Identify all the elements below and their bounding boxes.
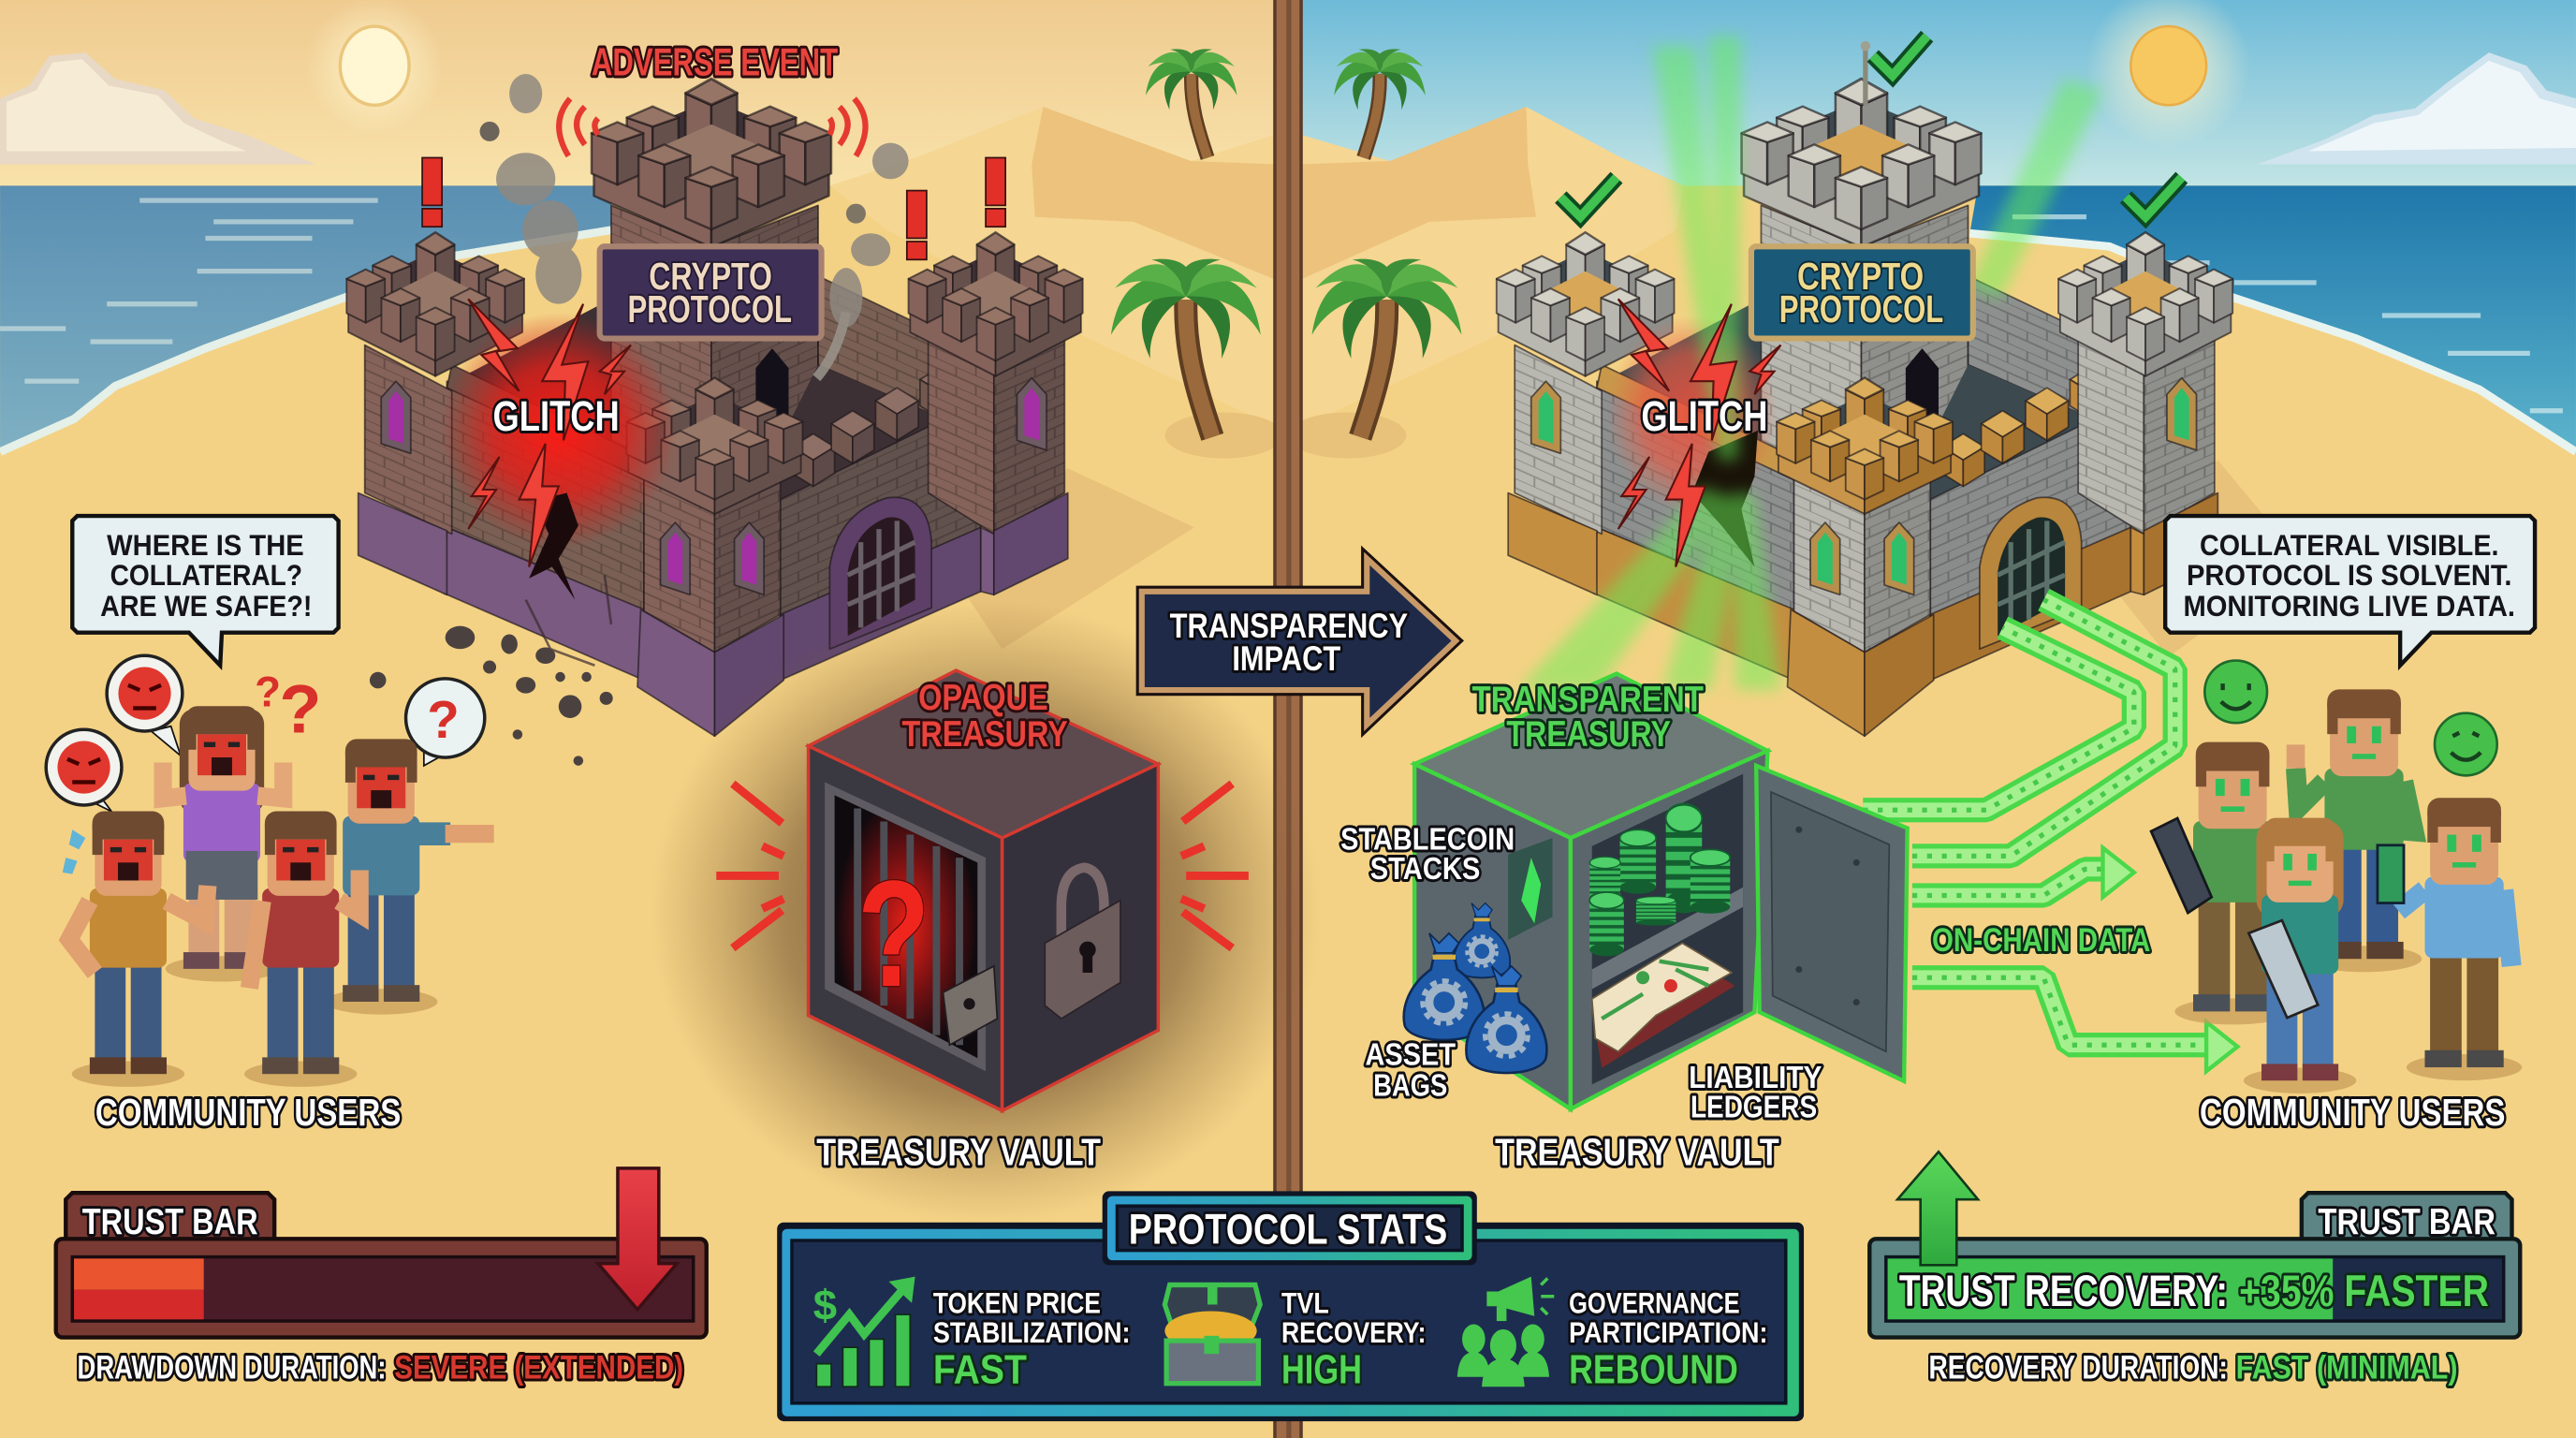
exclamation: right (986, 157, 1005, 227)
tab (66, 1193, 274, 1242)
track (1886, 1257, 2504, 1321)
vault interior (1592, 774, 1743, 1084)
red question mark: ? (857, 850, 929, 1019)
text: token price stabilization: FAST (933, 1347, 1027, 1393)
vault body (1414, 674, 1767, 1109)
speech bubble: worried users: WHERE IS THE (107, 528, 304, 562)
angry bubble: left (46, 729, 122, 812)
caption: recovery duration: RECOVERY DURATION: (1928, 1349, 2228, 1386)
text: token price stabilization: STABILIZATION: (933, 1315, 1131, 1349)
label plate: crypto protocol right: CRYPTO (1797, 255, 1924, 298)
castle: damaged left protocol (346, 79, 1083, 736)
panel: left trust bar (56, 1168, 707, 1338)
icon: megaphone and community (1457, 1277, 1554, 1387)
speech bubble: confident users: COLLATERAL VISIBLE. (2200, 528, 2498, 562)
text: asset bags (1365, 1037, 1456, 1104)
icon: rising price chart (813, 1277, 915, 1387)
text: liability ledgers: LEDGERS (1690, 1090, 1817, 1124)
red alert ticks (716, 784, 1249, 948)
green crystal (1508, 838, 1553, 940)
text: governance participation (1569, 1285, 1767, 1393)
label plate: crypto protocol right: PROTOCOL (1779, 287, 1943, 330)
text: governance participation: PARTICIPATION: (1569, 1315, 1767, 1349)
label plate: crypto protocol right (1751, 246, 1973, 339)
speech bubble: worried users (72, 516, 339, 666)
asset bags (1404, 903, 1546, 1073)
red question marks (255, 668, 321, 748)
text: stablecoin stacks: STABLECOIN (1340, 822, 1515, 857)
text: trust bar left: TRUST BAR (82, 1202, 258, 1242)
lightning bolts: left (468, 299, 631, 566)
person: man in red (244, 812, 359, 1087)
text: transparent treasury: TREASURY (1506, 714, 1671, 755)
recovery fill (1888, 1258, 2333, 1319)
label plate: crypto protocol left: CRYPTO (649, 255, 772, 298)
angry bubble: top (107, 655, 183, 756)
text: governance participation: REBOUND (1569, 1347, 1738, 1393)
text: GLITCH right: GLITCH (1641, 392, 1767, 440)
text: opaque treasury: OPAQUE (918, 678, 1048, 718)
track (72, 1257, 694, 1321)
text: tvl recovery: TVL (1281, 1285, 1329, 1319)
question bubble (406, 679, 485, 766)
text: adverse event: ADVERSE EVENT (592, 40, 838, 84)
exclamation: middle (907, 191, 927, 259)
frame (56, 1239, 707, 1338)
question bubble: ? (427, 690, 460, 749)
person: man in light blue (2378, 798, 2522, 1080)
text: asset bags: BAGS (1373, 1069, 1447, 1104)
text: community users left: COMMUNITY USERS (95, 1091, 401, 1134)
barred door (825, 782, 986, 1071)
caption: drawdown duration: DRAWDOWN DURATION: (78, 1349, 386, 1386)
speech bubble: worried users: COLLATERAL? (110, 558, 302, 592)
people: worried community (69, 706, 494, 1087)
person: man in orange (69, 812, 208, 1087)
liability ledger book (1592, 943, 1734, 1068)
red down arrow (598, 1168, 677, 1310)
cloud: right (2257, 52, 2576, 165)
text: trust recovery: TRUST RECOVERY: (1899, 1267, 2228, 1316)
text: stablecoin stacks: STACKS (1370, 852, 1480, 887)
person: thumbs up man (2287, 689, 2422, 972)
text: trust recovery: +35% FASTER (2239, 1267, 2489, 1316)
frame (1869, 1239, 2520, 1338)
text: trust bar right: TRUST BAR (2318, 1202, 2496, 1242)
palm: front right (1302, 246, 1471, 437)
text: liability ledgers: LIABILITY (1689, 1061, 1822, 1095)
dune: right (1301, 107, 1684, 427)
arrow: transparency impact (1142, 559, 1456, 725)
glitch explosion: right (1606, 315, 1778, 566)
green transparency rays (1518, 37, 2102, 690)
padlock (1045, 868, 1120, 1019)
background: right sky (1301, 0, 2576, 185)
vault shelf (1592, 888, 1743, 990)
text: transparent treasury (1472, 680, 1704, 755)
smiley: left (2204, 661, 2267, 723)
castle shadows (953, 413, 2300, 657)
text: asset bags: ASSET (1365, 1037, 1456, 1072)
palm: front left (1102, 246, 1270, 437)
caption: recovery duration: FAST (MINIMAL) (2236, 1349, 2458, 1386)
flag pole (1861, 41, 1870, 105)
text: token price stabilization (933, 1285, 1131, 1393)
text: token price stabilization: TOKEN PRICE (933, 1285, 1101, 1319)
red question marks: ? (279, 670, 321, 748)
sound waves (559, 98, 866, 156)
caption: drawdown duration: SEVERE (EXTENDED) (394, 1349, 683, 1386)
text: community users right: COMMUNITY USERS (2200, 1091, 2505, 1134)
panel: opaque treasury vault (649, 600, 1323, 1224)
people: confident community (2151, 689, 2522, 1093)
heading tab (1103, 1191, 1477, 1265)
icon: treasure chest (1164, 1284, 1260, 1384)
arrow: transparency impact: TRANSPARENCY (1170, 607, 1408, 645)
speech bubble: worried users: ARE WE SAFE?! (100, 589, 313, 623)
text: on-chain data: ON-CHAIN DATA (1932, 922, 2150, 959)
background: left sky (0, 0, 1275, 185)
arrow: transparency impact: IMPACT (1232, 639, 1341, 678)
palm: back left (1140, 41, 1243, 157)
text: governance participation: GOVERNANCE (1569, 1285, 1740, 1319)
heading tab: PROTOCOL STATS (1129, 1206, 1447, 1254)
on-chain data streams (1863, 600, 2210, 1045)
text: treasury vault right: TREASURY VAULT (1495, 1130, 1779, 1173)
text: tvl recovery: HIGH (1281, 1347, 1362, 1393)
person: woman in purple (163, 706, 284, 982)
dune: left (829, 107, 1275, 427)
vault body (809, 670, 1158, 1110)
sea: left (0, 185, 611, 452)
text: opaque treasury: TREASURY (902, 714, 1068, 755)
panel: right trust bar (1869, 1152, 2520, 1338)
glitch explosion: left (440, 312, 677, 666)
center divider post (1273, 0, 1303, 1438)
smiley: right (2435, 713, 2497, 775)
text: tvl recovery (1281, 1285, 1426, 1393)
person: man with tablet (2151, 742, 2291, 1024)
castle: restored right protocol (1497, 79, 2232, 736)
sweat drops (63, 829, 85, 874)
panel: transparent treasury vault (1404, 674, 1908, 1109)
cloud: left (0, 52, 315, 165)
debris rocks (370, 626, 613, 766)
red question marks: ? (255, 668, 281, 716)
icon: rising price chart: $ (813, 1281, 837, 1328)
text: opaque treasury (902, 678, 1068, 755)
text: transparent treasury: TRANSPARENT (1472, 680, 1704, 720)
text: GLITCH left: GLITCH (493, 392, 620, 440)
label plate: crypto protocol left: PROTOCOL (627, 287, 792, 330)
person: woman with tablet (2244, 818, 2356, 1093)
text: treasury vault left: TREASURY VAULT (816, 1130, 1101, 1173)
open vault door (1756, 766, 1908, 1081)
person: man pointing in blue (325, 739, 494, 1015)
text: liability ledgers (1689, 1061, 1822, 1124)
text: stablecoin stacks (1340, 822, 1515, 887)
green up arrow (1897, 1152, 1978, 1265)
sun: left pale sun (305, 0, 444, 135)
check marks (1560, 37, 2182, 217)
tab (2302, 1193, 2511, 1242)
panel: protocol stats (777, 1191, 1804, 1421)
door lock (943, 966, 997, 1045)
speech bubble: confident users: MONITORING LIVE DATA. (2183, 589, 2515, 623)
speech bubble: confident users: PROTOCOL IS SOLVENT. (2187, 558, 2511, 592)
stream arrowheads (2102, 848, 2237, 1071)
vault dark aura (649, 600, 1323, 1224)
exclamation: left (422, 157, 442, 227)
sea: right (1969, 185, 2576, 452)
text: tvl recovery: RECOVERY: (1281, 1315, 1426, 1349)
lightning bolts: right (1618, 299, 1781, 566)
coin stacks (1589, 804, 1730, 956)
low trust fill (74, 1258, 204, 1319)
caption: drawdown duration (78, 1349, 683, 1386)
palm: back right (1328, 41, 1431, 157)
smoke plumes: left (480, 74, 909, 378)
panel frame (777, 1223, 1804, 1421)
sun: right bright sun (2086, 0, 2250, 148)
speech bubble: confident users (2165, 516, 2535, 666)
label plate: crypto protocol left (600, 246, 822, 339)
